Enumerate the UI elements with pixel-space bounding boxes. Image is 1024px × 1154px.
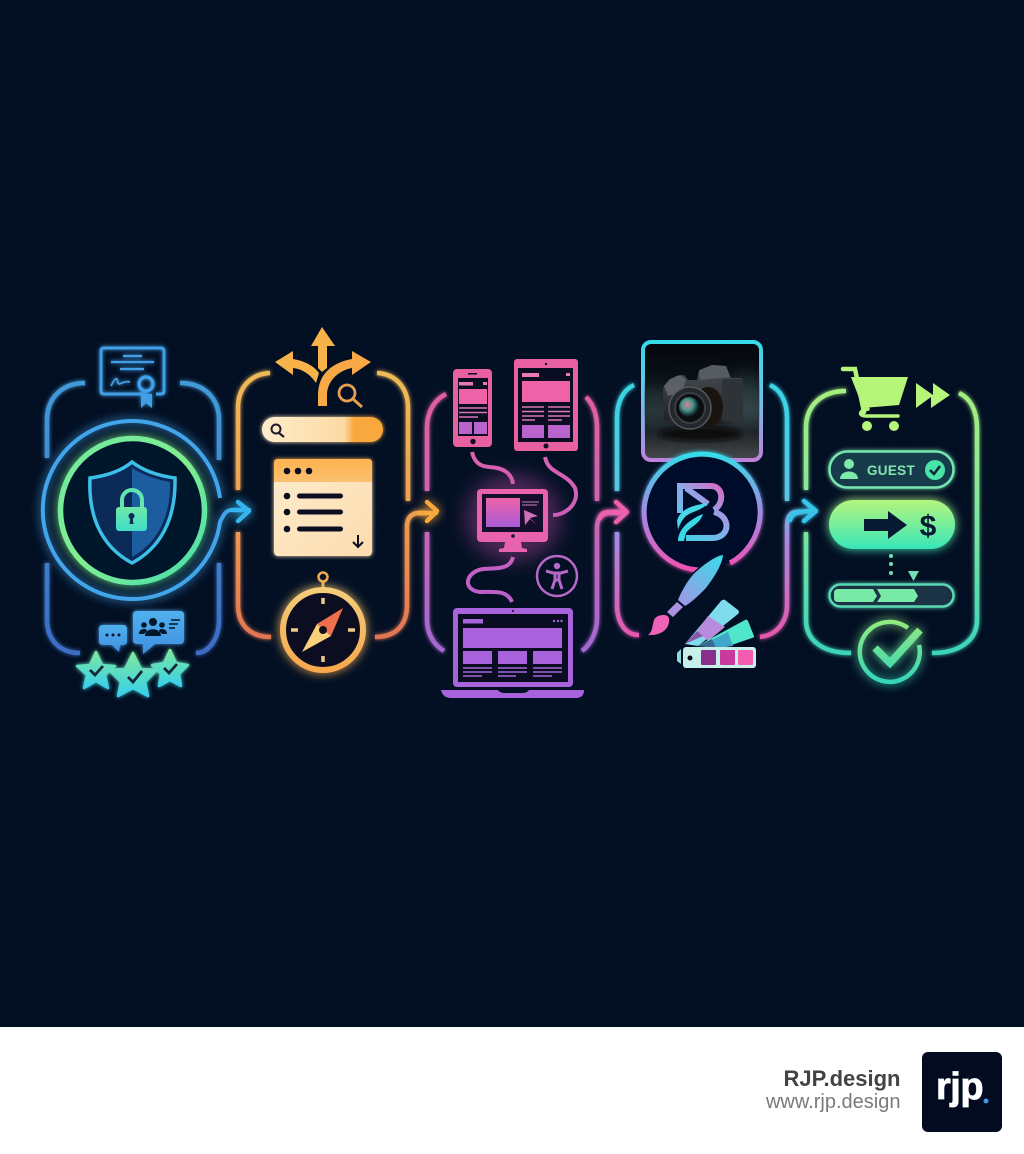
icon: certificate bbox=[101, 348, 164, 408]
icon: compass bbox=[283, 572, 363, 670]
panel: branding and visuals bbox=[617, 342, 803, 668]
panel: checkout bbox=[806, 369, 977, 682]
checkout button: $ bbox=[920, 510, 937, 543]
footer bar bbox=[0, 1027, 1024, 1154]
brand circle glow bbox=[660, 530, 745, 549]
inner green ring bbox=[60, 438, 204, 582]
panel: trust and security bbox=[43, 348, 232, 696]
icon: phone bbox=[453, 369, 492, 447]
arrow: trust to navigation bbox=[232, 502, 249, 521]
panel: responsive devices bbox=[427, 359, 620, 698]
progress dots bbox=[889, 554, 919, 581]
brand logo B bbox=[677, 486, 727, 541]
guest pill: GUEST bbox=[867, 463, 915, 478]
icon: accessibility bbox=[537, 556, 577, 596]
arrow: branding to checkout bbox=[790, 501, 816, 521]
outer ring bbox=[43, 421, 232, 599]
brand circle bbox=[644, 454, 760, 570]
arrow: navigation to devices bbox=[419, 502, 437, 521]
checkout button bbox=[829, 500, 955, 549]
frame brackets: devices bbox=[427, 394, 620, 651]
search bar bbox=[262, 417, 383, 442]
icon: paint brush bbox=[648, 555, 723, 635]
logo badge bbox=[922, 1052, 1002, 1132]
icon: shield and lock bbox=[90, 462, 175, 563]
connector curves bbox=[468, 452, 576, 602]
website url: www.rjp.design bbox=[765, 1091, 900, 1113]
icon: tablet bbox=[514, 359, 578, 451]
frame brackets: branding bbox=[617, 385, 803, 637]
icon: colour palette fan bbox=[677, 600, 756, 668]
panel: navigation and search bbox=[238, 327, 427, 670]
brand name: RJP.design bbox=[784, 1066, 900, 1091]
logo badge: rjp bbox=[936, 1066, 983, 1108]
frame brackets: trust bbox=[47, 383, 219, 653]
frame brackets: navigation bbox=[238, 373, 427, 637]
icon: laptop bbox=[441, 608, 584, 698]
icon: speech bubbles bbox=[99, 611, 184, 654]
icon: completed check bbox=[860, 622, 920, 682]
icon: branching arrows bbox=[275, 327, 371, 406]
guest pill bbox=[830, 452, 954, 488]
progress bar bbox=[830, 584, 954, 606]
icon: small magnifier bbox=[339, 385, 362, 407]
icon: monitor bbox=[465, 474, 561, 562]
arrow: devices to branding bbox=[600, 502, 627, 522]
photo: camera bbox=[639, 342, 767, 460]
icon: fast forward bbox=[916, 383, 950, 408]
frame brackets: checkout bbox=[806, 391, 977, 653]
icon: shopping cart bbox=[843, 369, 908, 431]
icon: rating stars bbox=[77, 650, 188, 696]
dropdown menu window bbox=[274, 459, 372, 556]
